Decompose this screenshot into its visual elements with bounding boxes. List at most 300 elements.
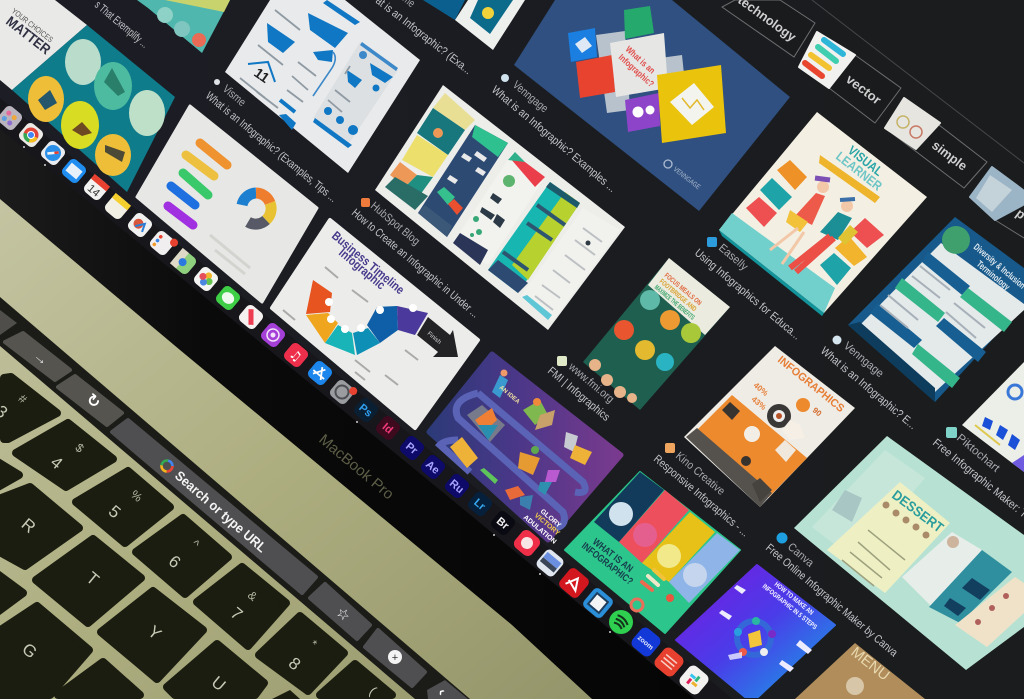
dock icon: mail [60,157,88,185]
circle [614,320,634,340]
white centre square [610,33,668,97]
venngage logo: VENNGAGE [672,166,701,191]
key: G: G [18,639,41,662]
silver laptop deck [0,199,592,699]
white panel [782,420,805,440]
column 2 footer [418,205,452,237]
floor edge [719,230,824,316]
runner [505,486,533,510]
teal panel [12,25,175,192]
dock icon: chrome [17,121,45,149]
key: &: & [245,588,260,604]
green square [624,6,654,39]
step centre [748,630,762,648]
chip: vector [799,32,901,123]
dock icon: bridge: Br [494,515,511,533]
key: #: # [16,391,30,407]
column 3 [453,152,545,265]
icon: tap [105,145,125,162]
column 1 orange [390,162,417,187]
caption: venngage: Venngage [510,79,550,115]
dock icon: podcasts [259,321,287,349]
dock icon: freeform [126,211,154,239]
person footer [752,478,772,502]
caption: kino creative: Kino Creative [673,450,727,498]
column 3 pie [503,175,515,187]
icon: speech bubble [575,37,592,53]
icon: gears [632,106,654,118]
dock icon: rush: Ru [447,477,466,496]
sign: yellow [835,236,867,266]
circle 2 [94,62,132,110]
caption: using infographics: Using Infographics for Educa... [692,247,802,342]
dock icon: preview photo [535,548,565,578]
dock icon: after effects: Ae [423,459,442,477]
caption: what is an infographic e: What is an Infographic? E... [818,345,918,432]
dark square [722,402,740,420]
teal card [929,550,1012,623]
button: refresh [58,376,122,425]
blue bar [171,186,195,205]
orange area [694,395,807,497]
desk man [518,446,540,475]
caption: kino creative [665,443,727,498]
column 1 dark [385,177,428,210]
house roof [248,62,275,82]
card: water infographic [225,0,420,173]
purple square [625,93,660,132]
column 5 footer [522,295,552,320]
card: fmi green [583,258,730,410]
centre text [617,44,657,89]
dock icon: premiere: Pr [403,440,420,458]
timeline title: Business Timeline [329,229,407,297]
caption: venngage second [832,336,886,380]
circle: bulb [657,544,681,568]
cream card [955,577,1024,647]
arrow text: Finish [426,331,442,346]
button: star: ☆ [332,603,354,625]
dock icon: calendar [82,174,110,202]
keyboard [0,377,392,699]
column 4 footer [488,260,528,293]
grey block right [660,55,684,76]
circle: puzzle [633,523,657,547]
dock icon: premiere [398,434,426,462]
yellow banner [819,155,880,203]
card: diversity [848,217,1024,402]
stat: 40% [752,381,770,398]
column 5 [520,208,620,322]
dock icon: calendar: 14 [85,183,102,200]
circle [656,353,674,371]
man [790,199,858,272]
blue square [568,28,597,62]
text lines [283,267,418,385]
navy banner [594,472,664,542]
dock icon: messages [214,284,242,312]
donut [631,599,643,611]
button: arrow: → [30,347,52,370]
timeline title: Infographic [336,246,388,292]
keys [0,377,392,695]
card: visual learner [719,112,927,316]
caption: free online infographic maker: Free Online Infographic Maker by Canva [763,542,900,660]
floor [719,213,835,313]
purple corner [1012,455,1024,472]
purple figure [538,470,560,495]
key: $: $ [73,440,87,456]
sign: teal right [820,253,851,285]
toolbar divider [812,0,1024,163]
column 3 red [510,158,545,187]
caption: canva [776,532,816,570]
diversity title: Terminology [974,259,1012,293]
card heading: YOUR CHOICES [10,6,55,44]
white box [775,440,796,462]
dock icon: reminders [148,227,180,259]
green tag [480,468,498,484]
column 5 dark dot [586,240,590,246]
circle [640,290,660,310]
caption: piktochart: Piktochart [954,432,1002,475]
column 1 yellow [402,135,448,177]
step labels [719,585,812,672]
button: add: + [392,652,398,664]
dock icon: photos [192,265,220,293]
icon: google g [162,460,172,472]
caption: venngage second: Venngage [841,340,886,380]
circle: tools [683,563,707,587]
purple bar [168,206,193,225]
yellow line [975,425,1000,445]
dock icon: safari [39,139,67,167]
card: your choices matter [0,0,175,192]
card: business timeline [272,220,478,428]
centre text: What is an [624,44,657,76]
dock running dots [23,146,611,633]
caption: responsive infographics: Responsive Infographics - ... [651,453,751,539]
button: add [365,630,425,686]
sheet block [832,490,862,522]
yellow bar [186,155,214,176]
yellow wedge [306,313,338,343]
machine figure [467,405,505,442]
caption: what is an infographic examples tips: What is an Infographic? (Examples, Tips ... [203,90,339,205]
button: top left [0,310,17,335]
caption: visme: Visme [220,83,248,109]
sign: orange [777,160,807,190]
icon: plant [72,122,92,136]
idea text: AN IDEA [498,385,521,406]
eye circle [767,404,791,428]
infographics title: INFOGRAPHICS [775,354,846,415]
ice creams [882,502,930,538]
bottom strip [313,118,352,148]
card: grey visme [137,106,317,302]
ring chart [242,193,271,224]
button: search or type URL [112,420,316,593]
band text: FOCUS MEALS ON [663,272,702,307]
key: *: * [307,637,320,651]
pie [744,426,760,442]
victory text: ADULATION [522,514,557,546]
column 1 green [405,175,433,195]
caption: hubspot blog [361,198,422,248]
small blue tag [279,114,296,130]
key: Y: Y [144,622,165,644]
column 5 lines [535,228,602,310]
orange bar [200,143,227,165]
circle 5 [61,101,99,149]
column 1 orange dot [433,128,443,138]
caption: fmi org [557,356,616,406]
button: back [427,680,468,699]
dessert title: DESSERT [889,487,947,536]
small banner [360,42,398,71]
caption: fmi infographics: FMI | Infographics [545,365,612,424]
key: U: U [208,673,229,695]
ghost shapes [210,235,250,274]
dock icon: maps [170,248,198,276]
dock icon: red stack [652,645,686,679]
drawing man [523,398,555,430]
chip: technology [722,0,815,57]
icon: chart board [670,83,714,125]
inner panel [860,243,1024,392]
card: infographics orange [684,346,855,507]
dock icon: photoshop [352,396,380,424]
button: back: ‹ [435,684,449,699]
menu lines [842,530,905,586]
small map [347,70,362,88]
dock icon: photoshop: Ps [356,402,374,420]
caption: hubspot blog: HubSpot Blog [368,200,422,248]
icon: factory [38,90,57,110]
column 1 teal [417,108,465,155]
usa map [267,23,295,53]
bars [168,143,227,225]
dock [0,104,711,697]
cream dessert sheet [827,482,950,593]
blue tub [308,13,348,48]
blue banner [669,533,740,603]
yellow banner [642,512,715,582]
key: (: ( [366,683,380,698]
cream card marks [975,593,1009,625]
headline: WHAT IS AN [590,537,635,575]
caption: canva: Canva [785,541,816,570]
how to title: INFOGRAPHIC IN 5 STEPS [761,583,818,632]
teal blocks [944,578,990,616]
victory text: VICTORY [533,512,561,537]
red banner [619,490,689,563]
chip: vector: vector [843,71,884,107]
purple segment [397,306,428,335]
column 2 red box [448,199,463,215]
circle 3 [129,90,165,136]
touch bar strip [0,297,470,699]
teal wedge [325,325,355,355]
dock icon: zoom [629,625,663,659]
thumbnail icons [157,7,206,47]
search text: Search or type URL [172,468,269,555]
right panel [313,42,398,145]
step ring [737,621,771,655]
stat: 43% [750,395,768,412]
small drop [359,51,367,59]
column 2 flow [447,151,487,184]
dock icon: settings [328,376,359,407]
dock icon: news [237,303,265,331]
headline [579,537,635,588]
key: 4: 4 [47,452,66,473]
key: 8: 8 [285,653,304,674]
band text: MAXIMIZE THE BENEFITS [653,284,696,322]
column 4 [488,182,580,293]
chip: next [970,167,1024,238]
woman [770,178,830,264]
column 2 navy [418,125,508,237]
card: how to make an infographic [676,565,835,697]
band text [653,272,702,322]
bomb [741,456,751,466]
stat: 90 [811,406,824,419]
balloon [666,594,674,602]
white card [902,532,982,607]
card: top dark thumbnail [423,0,525,50]
circle 4 [28,76,64,122]
key: ^: ^ [189,537,203,551]
column 4 lime [512,192,580,280]
card title: MATTER [3,13,54,57]
dock icon: after effects [419,453,447,481]
vector thumbnail bars [805,40,843,76]
button: refresh: ↻ [82,389,105,412]
dock icon: rush [443,472,471,500]
column 3 stripes [508,152,525,162]
dock icon: acrobat [557,566,591,600]
yellow square [657,65,726,143]
key: T: T [82,568,103,589]
dock band [0,98,733,699]
key: 6: 6 [165,551,184,572]
dock icon: brackets [581,586,615,620]
dock icon: lightroom [466,490,494,518]
card: menu [795,643,925,699]
visual title: VISUAL [845,143,886,179]
dock icon: indesign [374,414,402,442]
menu illustration [846,677,864,695]
column 3 dots [470,216,482,237]
caption: fmi org: www.fmi.org [565,361,616,406]
how to title: HOW TO MAKE AN [773,581,814,617]
button: arrow [5,333,70,380]
circle [660,310,680,330]
caption: how to create: How to Create an Infographic in Under ... [349,207,481,320]
card: infographic columns hubspot [375,85,625,330]
dock icon: launchpad [0,104,24,132]
key: 5: 5 [105,501,124,522]
globe icon [942,226,970,254]
caption: venngage [501,74,550,115]
circle 6 [95,134,131,176]
card: what is an infographic venngage [514,0,790,211]
section headers [870,252,1012,388]
dock icon: lightroom: Lr [471,497,488,513]
victory text: GLORY [539,508,562,530]
black arrow [417,317,458,357]
sign: red [746,197,777,227]
button: star [310,584,370,639]
dock icon: slack [677,663,711,697]
text lines [240,10,350,112]
winding road [440,393,585,528]
van [450,437,478,468]
blue tiles [982,417,1020,450]
red square [576,55,615,98]
card: piktochart [962,362,1024,472]
circle [635,340,655,360]
key: R: R [18,515,39,537]
band text: FOOTBRIDGE AND [658,278,697,313]
key: 7: 7 [227,603,246,624]
orange disc [796,398,810,412]
caption: what is an infographic examples: What is an Infographic? Examples ... [489,84,618,195]
visual title: LEARNER [833,149,885,194]
dock icon: notes [103,193,131,221]
circle [681,323,701,343]
dock icon: music: ♫ [286,347,304,366]
column 2 green box [437,187,455,205]
simple thumbnail rings [897,116,922,138]
column 2 header [472,125,508,157]
column 3 marks [480,193,505,228]
venngage logo [664,160,701,191]
blue man [492,370,508,398]
small icons [324,84,380,135]
centre text: Infographic? [617,52,656,89]
dock icon: app store [306,359,334,387]
pale sheet [812,450,925,560]
white band [648,258,730,335]
icon: trees [104,68,125,96]
column 3 dark [453,233,488,265]
MacBook Pro label: MacBook Pro [315,431,397,503]
grey block [596,31,630,113]
black screen bezel [0,129,695,699]
headline: INFOGRAPHIC? [579,541,635,588]
how to title [761,581,818,632]
blue segment [367,306,398,343]
card photo [947,536,959,548]
menu title: MENU [848,644,893,684]
caption: that exemplify: s That Exemplify ... [92,0,150,51]
caption: visme [214,79,248,109]
dock icon: red app [512,528,542,558]
circle 1 [65,39,101,85]
monitor figure [564,432,592,465]
orange wedge [306,280,332,314]
column 4 head [546,182,580,208]
key: I corner [272,690,300,699]
people [589,359,637,403]
small graphics [642,570,664,590]
caption: easelly: Easelly [716,242,750,273]
body lines [880,266,985,338]
number: 11 [251,64,273,86]
card: dessert canva [794,436,1024,670]
